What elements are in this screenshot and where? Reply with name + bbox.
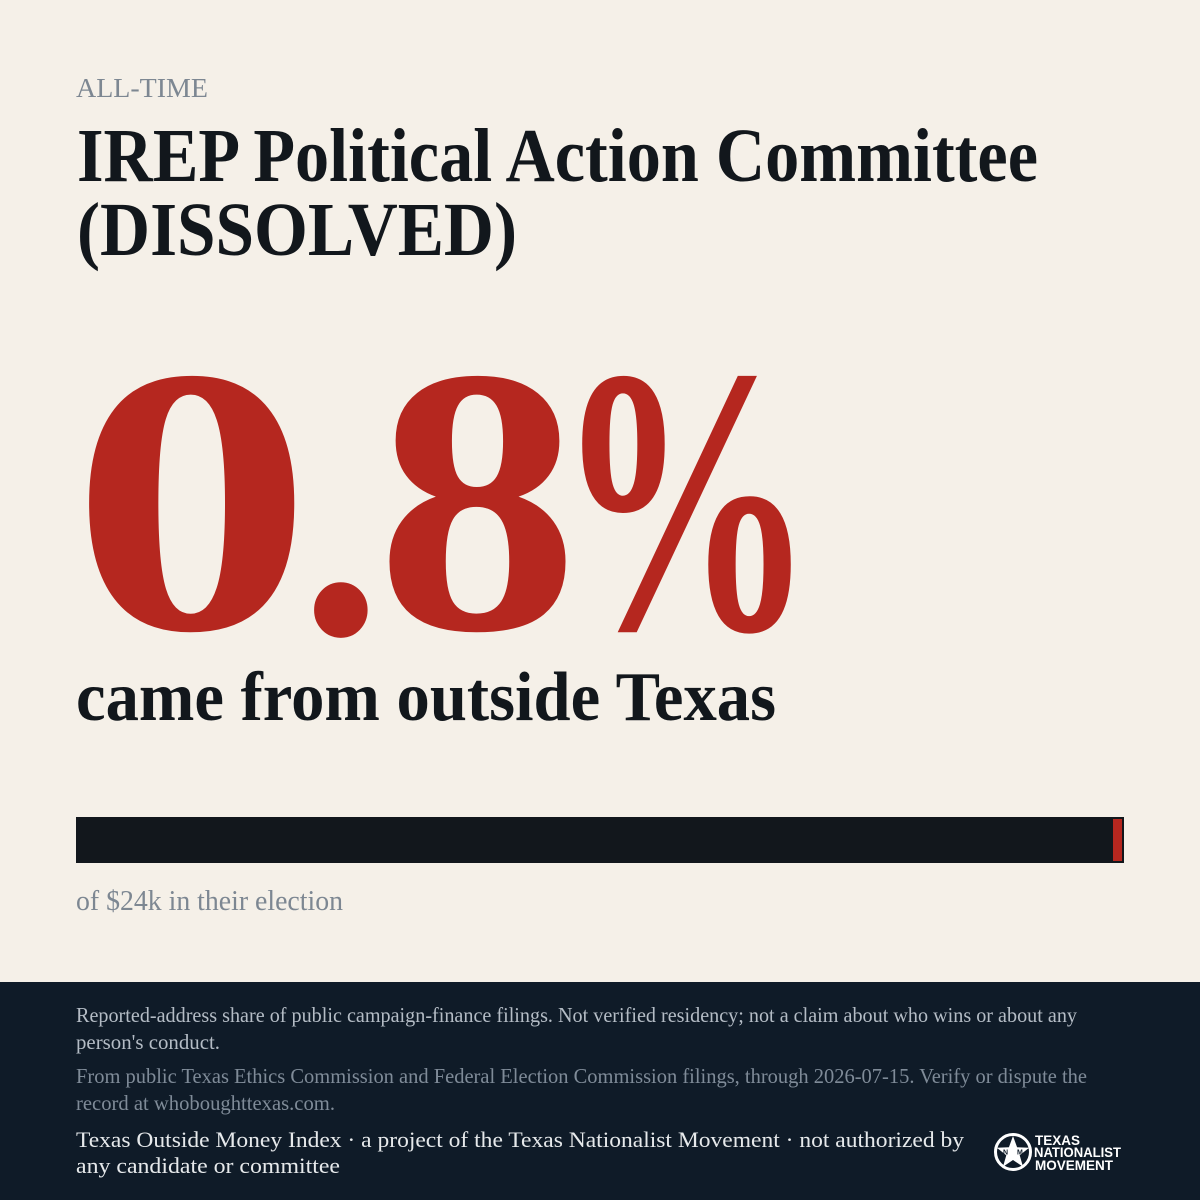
- icon: star in circle: M: [1017, 1150, 1023, 1156]
- title: [77, 114, 1038, 272]
- big percentage: [71, 291, 815, 712]
- big percentage: .: [300, 328, 382, 708]
- footer panel: [0, 982, 1200, 1200]
- big percentage: 0: [71, 291, 313, 712]
- big percentage: %: [556, 291, 815, 712]
- icon: star in circle: [996, 1134, 1030, 1170]
- logo: Texas Nationalist Movement: [996, 1133, 1122, 1173]
- logo wordmark: MOVEMENT: [1035, 1158, 1114, 1173]
- disclaimer text: Reported-address share of public campaign-finance filings. Not verified residency; not a claim about who wins or about any: [76, 1003, 1077, 1027]
- icon: star in circle: N: [1003, 1150, 1008, 1156]
- source text: From public Texas Ethics Commission and Federal Election Commission filings, through 2026-07-15. Verify or dispute the: [76, 1064, 1087, 1088]
- bar segment: outside share: [1113, 819, 1122, 861]
- attribution text: Texas Outside Money Index · a project of the Texas Nationalist Movement · not authorized by: [76, 1127, 964, 1152]
- disclaimer text: [76, 1003, 1077, 1054]
- disclaimer text: person's conduct.: [76, 1030, 220, 1054]
- logo wordmark: TEXAS: [1035, 1133, 1080, 1148]
- source text: [76, 1064, 1087, 1115]
- subheading: came from outside Texas: [76, 659, 776, 736]
- source text: record at whoboughttexas.com.: [76, 1091, 335, 1115]
- bar caption: of $24k in their election: [76, 886, 343, 917]
- eyebrow: ALL-TIME: ALL-TIME: [76, 73, 208, 103]
- logo wordmark: [1034, 1133, 1122, 1173]
- title: (DISSOLVED): [77, 188, 517, 272]
- big percentage: 8: [376, 291, 579, 712]
- attribution text: any candidate or committee: [76, 1153, 340, 1178]
- attribution text: [76, 1127, 964, 1178]
- progress bar: [76, 817, 1124, 863]
- title: IREP Political Action Committee: [77, 114, 1038, 198]
- logo wordmark: NATIONALIST: [1034, 1145, 1122, 1160]
